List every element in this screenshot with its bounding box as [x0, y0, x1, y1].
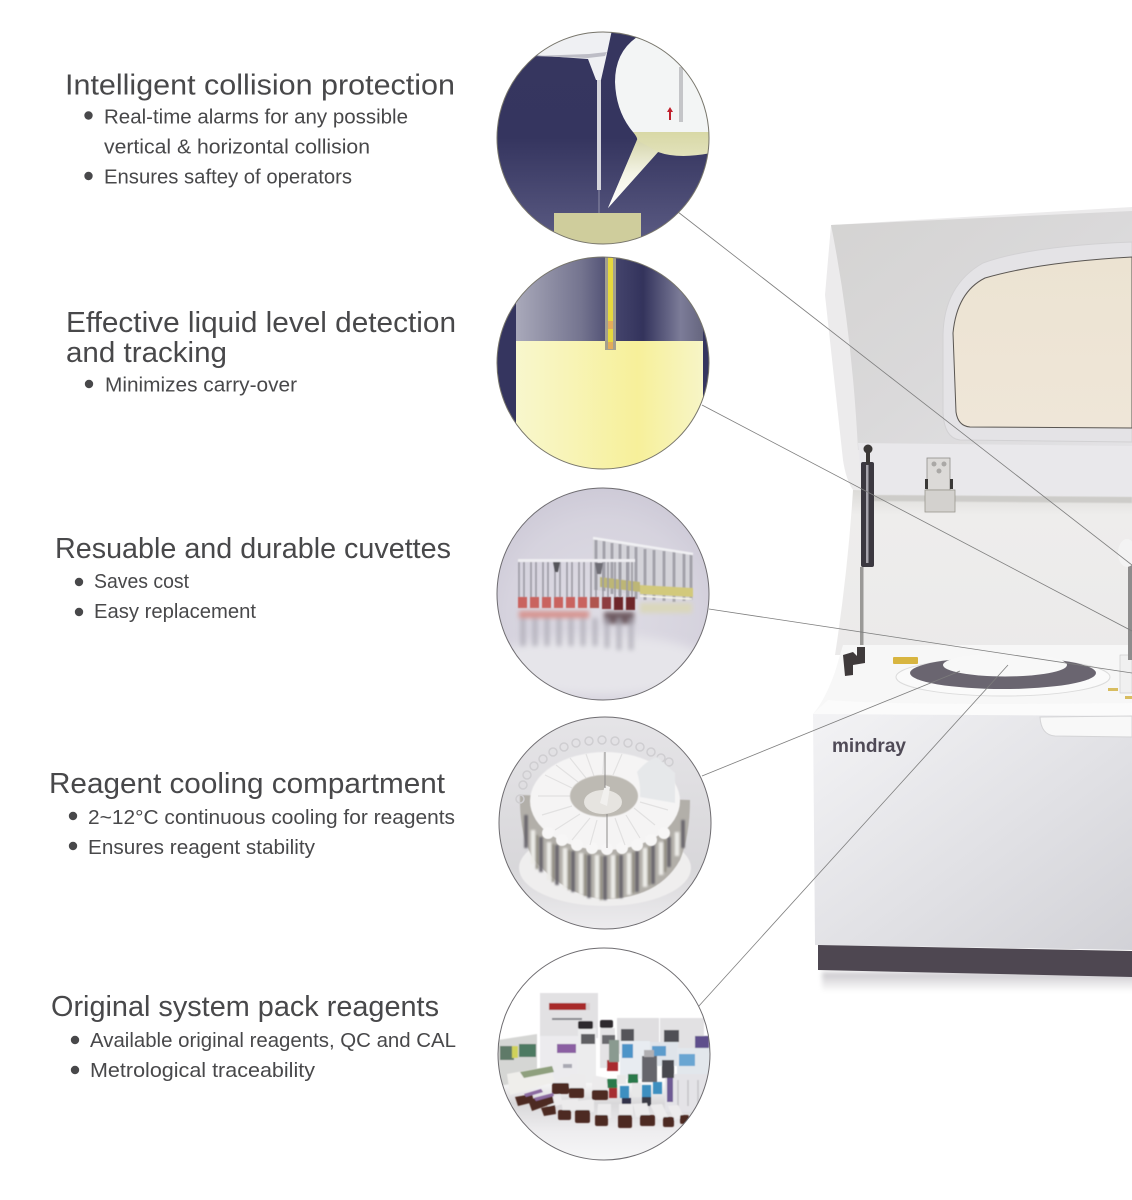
back cuvette strip — [593, 538, 693, 602]
air zone gradient — [516, 250, 703, 341]
reagent disk ring — [896, 658, 1110, 696]
heading: and tracking — [66, 337, 227, 369]
machine floor shadow — [822, 972, 1132, 992]
heading: Intelligent collision protection — [65, 70, 455, 102]
red liquid — [518, 597, 635, 610]
front cuvette strip — [518, 559, 635, 610]
section 5: system pack reagents text — [51, 991, 456, 1082]
left green kits — [498, 1034, 537, 1086]
section 2: liquid level text — [66, 307, 456, 396]
liquid reagent — [516, 341, 703, 476]
bullet list: vertical & horizontal collision — [104, 136, 370, 158]
cabinet front — [813, 714, 1132, 950]
section 1: collision protection text — [65, 70, 455, 188]
purple label box — [540, 1036, 578, 1084]
blue label boxes — [620, 1041, 710, 1079]
circle 2: liquid level diagram — [496, 256, 710, 470]
circle 3: cuvettes photo — [496, 488, 710, 700]
strut mount — [843, 647, 865, 676]
section 4: reagent cooling text — [49, 768, 455, 859]
white wedge cover — [637, 757, 675, 803]
lid inner surface — [831, 211, 1132, 450]
carousel tube wall — [520, 795, 690, 899]
heading: Resuable and durable cuvettes — [55, 533, 451, 565]
bullet list: Ensures saftey of operators — [104, 166, 352, 188]
reagent disk dark cover — [910, 657, 1096, 689]
bullet list: Real-time alarms for any possible — [104, 106, 408, 128]
section 3: cuvettes text — [55, 533, 451, 623]
brown kit packs — [515, 1083, 689, 1128]
circle 1: collision protection diagram — [496, 32, 710, 244]
floor highlight — [512, 638, 693, 695]
white reagent tray — [530, 752, 680, 850]
mindray logo: mindray — [832, 736, 906, 757]
reagent tube labels — [526, 815, 683, 900]
dark-cap bottles — [578, 1020, 615, 1083]
bullet list: Saves cost — [94, 570, 189, 593]
back wall below lid — [835, 490, 1132, 655]
bullet list: 2~12°C continuous cooling for reagents — [88, 806, 455, 829]
tray radial ribs — [538, 752, 668, 845]
bullet list — [69, 806, 455, 859]
white low box — [507, 1066, 554, 1086]
small color-cap vials — [607, 1040, 674, 1107]
boxes and bottles — [498, 993, 710, 1128]
gas strut — [860, 444, 874, 649]
open lid outer rim — [825, 207, 1132, 500]
purple pack labels — [524, 1089, 554, 1101]
heading: Original system pack reagents — [51, 991, 439, 1023]
carousel base — [519, 850, 691, 906]
bullet list — [84, 106, 408, 188]
tube caps along tray front — [542, 827, 670, 855]
cabinet handle recess — [1040, 716, 1132, 737]
analyzer machine photo — [813, 207, 1132, 992]
circle 5: reagent kits photo — [495, 945, 715, 1165]
purple tall box — [664, 1074, 706, 1110]
heading — [66, 307, 456, 369]
main white box — [540, 993, 598, 1038]
callout bubble — [608, 38, 708, 208]
yellow warning label — [893, 657, 918, 664]
right white boxes — [617, 1018, 709, 1054]
window frame — [943, 242, 1132, 442]
liquid probe — [605, 250, 616, 350]
cabinet base — [818, 945, 1132, 977]
circle 4: reagent carousel photo — [495, 710, 715, 936]
heading: Effective liquid level detection — [66, 307, 456, 339]
sample block — [554, 213, 641, 244]
reagent disk white lid — [943, 654, 1067, 676]
window glass — [953, 257, 1132, 428]
kit pack white caps — [545, 1074, 684, 1120]
center well — [570, 775, 638, 817]
probe arm — [536, 32, 612, 80]
bullet list: Metrological traceability — [90, 1059, 316, 1082]
bullet list — [75, 570, 256, 623]
heading: Reagent cooling compartment — [49, 768, 445, 800]
bullet list: Easy replacement — [94, 600, 256, 623]
bullet list: Ensures reagent stability — [88, 836, 316, 859]
cuvette reflections — [519, 603, 692, 650]
leader lines — [678, 212, 1132, 1007]
bullet list — [71, 1029, 456, 1082]
deck — [813, 645, 1132, 716]
hinge bracket — [925, 458, 955, 512]
lid hinge beam — [858, 443, 1132, 497]
bullet list: Available original reagents, QC and CAL — [90, 1029, 456, 1052]
center hub — [584, 752, 622, 848]
bullet list: Minimizes carry-over — [105, 374, 297, 396]
deck details — [1108, 539, 1132, 699]
red up arrow — [667, 107, 673, 120]
outer tube caps ring — [516, 736, 673, 803]
probe needle — [597, 80, 601, 213]
